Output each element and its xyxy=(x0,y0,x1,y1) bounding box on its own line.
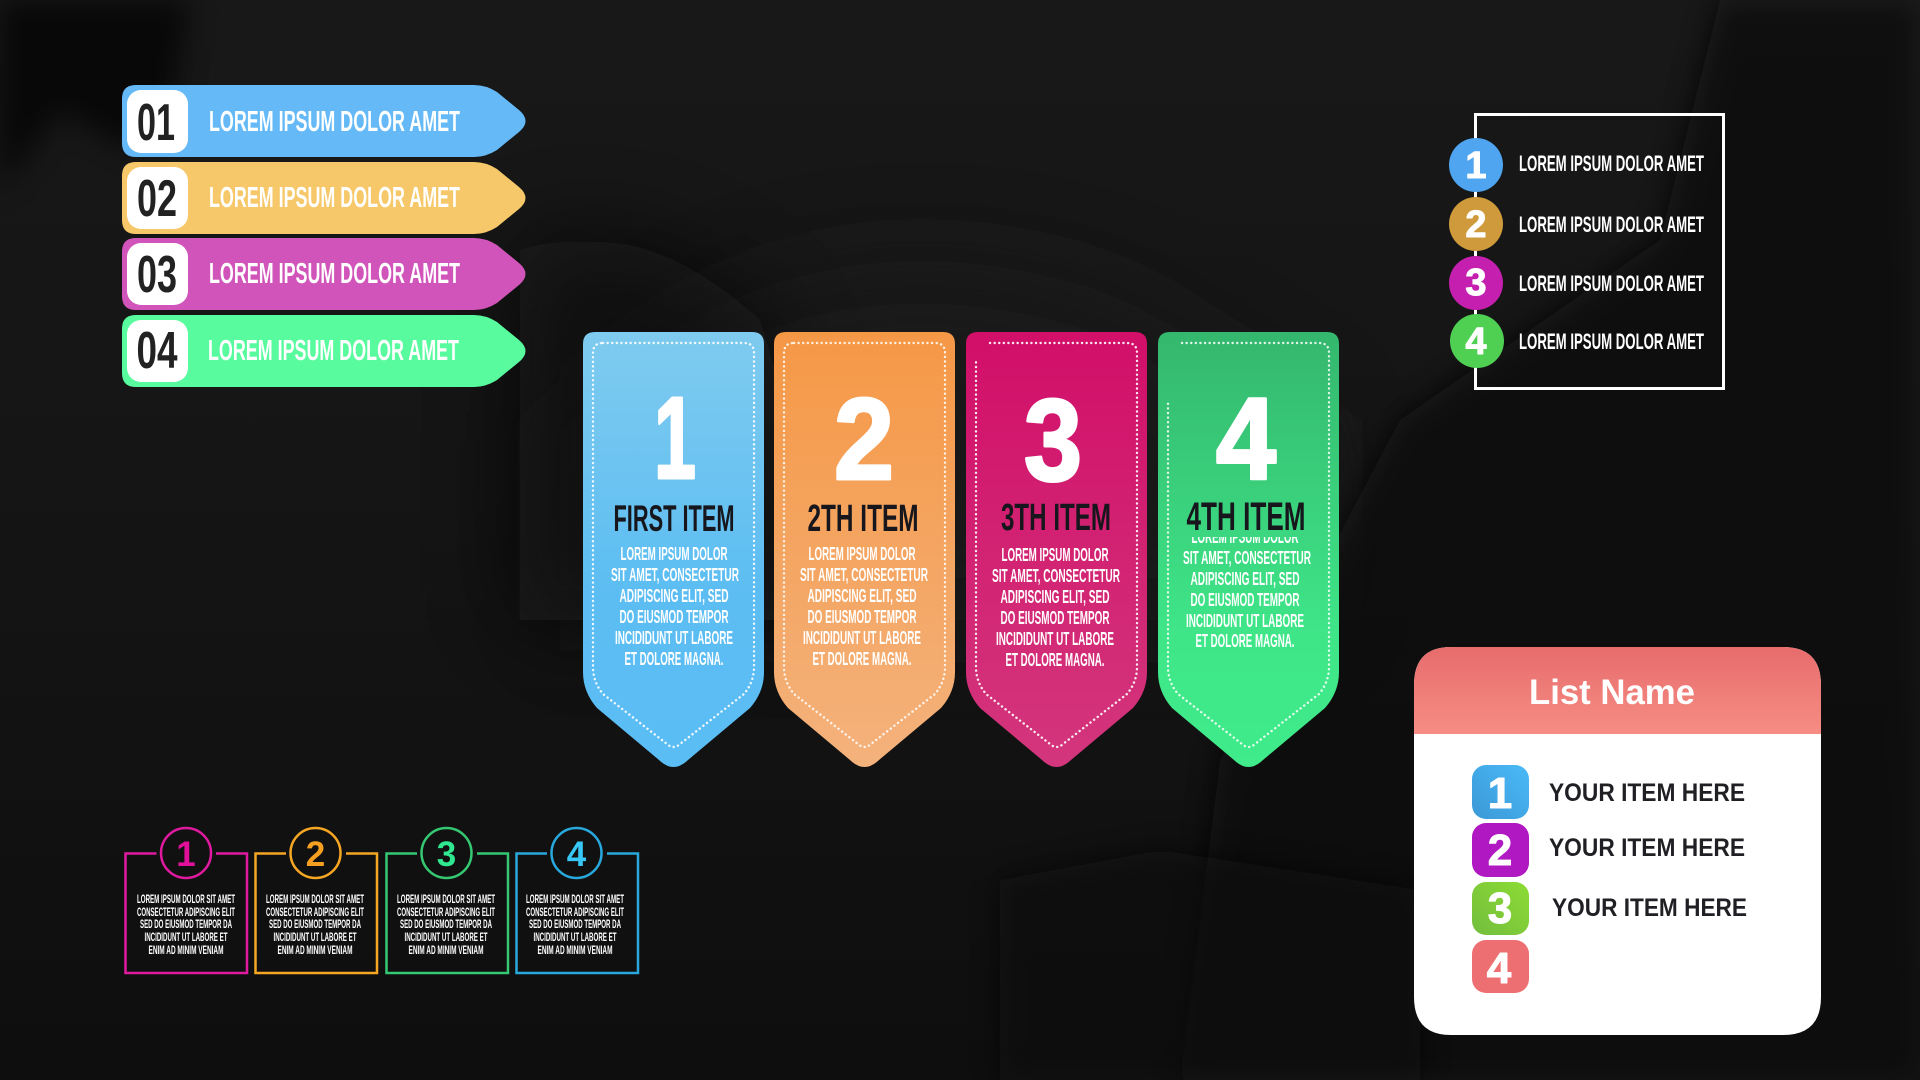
box 4: CONSECTETUR ADIPISCING ELIT xyxy=(526,905,624,919)
tag 1: first item: ADIPISCING ELIT, SED xyxy=(620,586,728,606)
box 4: SED DO EIUSMOD TEMPOR DA xyxy=(529,917,621,931)
card row 1 xyxy=(1472,765,1745,819)
list row 1: LOREM IPSUM DOLOR AMET xyxy=(1519,151,1704,176)
card row 4: 4 xyxy=(1487,944,1512,993)
box 3: INCIDIDUNT UT LABORE ET xyxy=(404,930,488,944)
box 4 xyxy=(516,828,638,973)
tag 3: third item: SIT AMET, CONSECTETUR xyxy=(992,566,1120,586)
card row 1: YOUR ITEM HERE xyxy=(1549,779,1745,807)
tag 1: first item: SIT AMET, CONSECTETUR xyxy=(611,565,739,585)
box 4: LOREM IPSUM DOLOR SIT AMET xyxy=(526,892,624,906)
box 3 xyxy=(386,828,508,973)
tag 2: second item: ET DOLORE MAGNA. xyxy=(812,649,912,669)
box 3: ENIM AD MINIM VENIAM xyxy=(408,943,484,957)
list row 4: 4 xyxy=(1465,321,1487,363)
box 1 xyxy=(126,828,247,973)
tag 2: second item: 2TH ITEM xyxy=(808,498,918,540)
list row 2: 2 xyxy=(1465,204,1487,246)
box 3: CONSECTETUR ADIPISCING ELIT xyxy=(397,905,495,919)
box 3: 3 xyxy=(437,835,456,874)
tag 3: third item xyxy=(966,332,1147,767)
panel: numbered arrow banners xyxy=(122,85,526,387)
tag 3: third item: INCIDIDUNT UT LABORE xyxy=(996,629,1114,649)
box 2: LOREM IPSUM DOLOR SIT AMET xyxy=(266,892,364,906)
list row 1 xyxy=(1449,138,1704,192)
tag 2: second item: LOREM IPSUM DOLOR xyxy=(808,544,916,564)
box 1: INCIDIDUNT UT LABORE ET xyxy=(144,930,228,944)
tag 4: fourth item: DO EIUSMOD TEMPOR xyxy=(1190,590,1300,610)
tag 4: fourth item: SIT AMET, CONSECTETUR xyxy=(1183,548,1311,568)
card header xyxy=(1414,647,1821,734)
banner 03: LOREM IPSUM DOLOR AMET xyxy=(209,258,460,290)
banner 03: 03 xyxy=(137,246,177,304)
tag 2: second item: 2 xyxy=(834,374,894,504)
banner 03 xyxy=(122,238,526,310)
tag 2: second item: SIT AMET, CONSECTETUR xyxy=(800,565,928,585)
box 4: ENIM AD MINIM VENIAM xyxy=(538,943,612,957)
banner 02: LOREM IPSUM DOLOR AMET xyxy=(209,182,460,214)
tag 4: fourth item: 4 xyxy=(1216,374,1276,504)
box 2: CONSECTETUR ADIPISCING ELIT xyxy=(266,905,364,919)
box 4: 4 xyxy=(567,835,587,874)
box 2 xyxy=(256,828,377,973)
panel: four pointed tags xyxy=(583,332,1339,767)
box 1: SED DO EIUSMOD TEMPOR DA xyxy=(140,917,232,931)
tag 2: second item: ADIPISCING ELIT, SED xyxy=(808,586,916,606)
box 2: 2 xyxy=(306,835,325,874)
box 2: ENIM AD MINIM VENIAM xyxy=(278,943,352,957)
banner 04: 04 xyxy=(136,322,178,380)
tag 3: third item: ET DOLORE MAGNA. xyxy=(1006,650,1104,670)
box 1: LOREM IPSUM DOLOR SIT AMET xyxy=(137,892,235,906)
tag 4: fourth item: ET DOLORE MAGNA. xyxy=(1196,631,1294,651)
list row 3: 3 xyxy=(1465,262,1487,304)
tag 3: third item: LOREM IPSUM DOLOR xyxy=(1002,545,1108,565)
card row 1: 1 xyxy=(1488,769,1512,818)
card row 2: YOUR ITEM HERE xyxy=(1549,834,1745,862)
banner 01: 01 xyxy=(137,94,175,152)
tag 2: second item: INCIDIDUNT UT LABORE xyxy=(803,628,921,648)
box 1: 1 xyxy=(176,835,196,874)
box 4: INCIDIDUNT UT LABORE ET xyxy=(534,930,617,944)
card row 2 xyxy=(1472,823,1745,877)
panel: list name card xyxy=(1414,647,1821,1035)
tag 3: third item: ADIPISCING ELIT, SED xyxy=(1000,587,1110,607)
box 1: ENIM AD MINIM VENIAM xyxy=(148,943,224,957)
card header: List Name xyxy=(1529,673,1695,712)
tag 1: first item: FIRST ITEM xyxy=(614,498,734,539)
banner 01 xyxy=(122,85,526,157)
banner 02: 02 xyxy=(137,170,177,228)
box 3: SED DO EIUSMOD TEMPOR DA xyxy=(400,917,492,931)
tag 4: fourth item: LOREM IPSUM DOLOR xyxy=(1192,527,1298,547)
card row 3: YOUR ITEM HERE xyxy=(1552,894,1747,922)
card row 4 xyxy=(1472,940,1529,993)
list row 3 xyxy=(1449,256,1704,310)
banner 04: LOREM IPSUM DOLOR AMET xyxy=(208,335,459,367)
tag 1: first item: 1 xyxy=(654,373,696,503)
box 3: LOREM IPSUM DOLOR SIT AMET xyxy=(397,892,495,906)
tag 3: third item: 3 xyxy=(1024,375,1082,505)
tag 4: fourth item xyxy=(1158,332,1339,767)
list row 1: 1 xyxy=(1465,145,1487,187)
tag 2: second item: DO EIUSMOD TEMPOR xyxy=(808,607,916,627)
list row 2: LOREM IPSUM DOLOR AMET xyxy=(1519,212,1704,237)
tag 2: second item xyxy=(774,332,955,767)
box 2: INCIDIDUNT UT LABORE ET xyxy=(274,930,357,944)
tag 1: first item: DO EIUSMOD TEMPOR xyxy=(620,607,728,627)
box 2: SED DO EIUSMOD TEMPOR DA xyxy=(269,917,361,931)
tag 1: first item: ET DOLORE MAGNA. xyxy=(624,649,724,669)
list row 4: LOREM IPSUM DOLOR AMET xyxy=(1519,329,1704,354)
tag 4: fourth item: 4TH ITEM xyxy=(1186,495,1306,539)
tag 3: third item: DO EIUSMOD TEMPOR xyxy=(1000,608,1110,628)
panel: framed numbered list xyxy=(1449,114,1724,388)
card row 2: 2 xyxy=(1488,826,1512,875)
tag 1: first item: LOREM IPSUM DOLOR xyxy=(620,544,728,564)
tag 4: fourth item: INCIDIDUNT UT LABORE xyxy=(1186,611,1304,631)
card row 3 xyxy=(1472,882,1747,935)
banner 04 xyxy=(122,315,526,387)
list row 3: LOREM IPSUM DOLOR AMET xyxy=(1519,271,1704,296)
card row 3: 3 xyxy=(1488,884,1512,933)
tag 1: first item: INCIDIDUNT UT LABORE xyxy=(615,628,733,648)
list row 2 xyxy=(1449,197,1704,251)
list row 4 xyxy=(1450,314,1704,368)
tag 1: first item xyxy=(583,332,764,767)
banner 01: LOREM IPSUM DOLOR AMET xyxy=(209,106,460,138)
tag 3: third item: 3TH ITEM xyxy=(1001,497,1111,539)
banner 02 xyxy=(122,162,526,234)
panel: four outlined boxes xyxy=(126,828,638,973)
tag 4: fourth item: ADIPISCING ELIT, SED xyxy=(1190,569,1300,589)
box 1: CONSECTETUR ADIPISCING ELIT xyxy=(137,905,235,919)
